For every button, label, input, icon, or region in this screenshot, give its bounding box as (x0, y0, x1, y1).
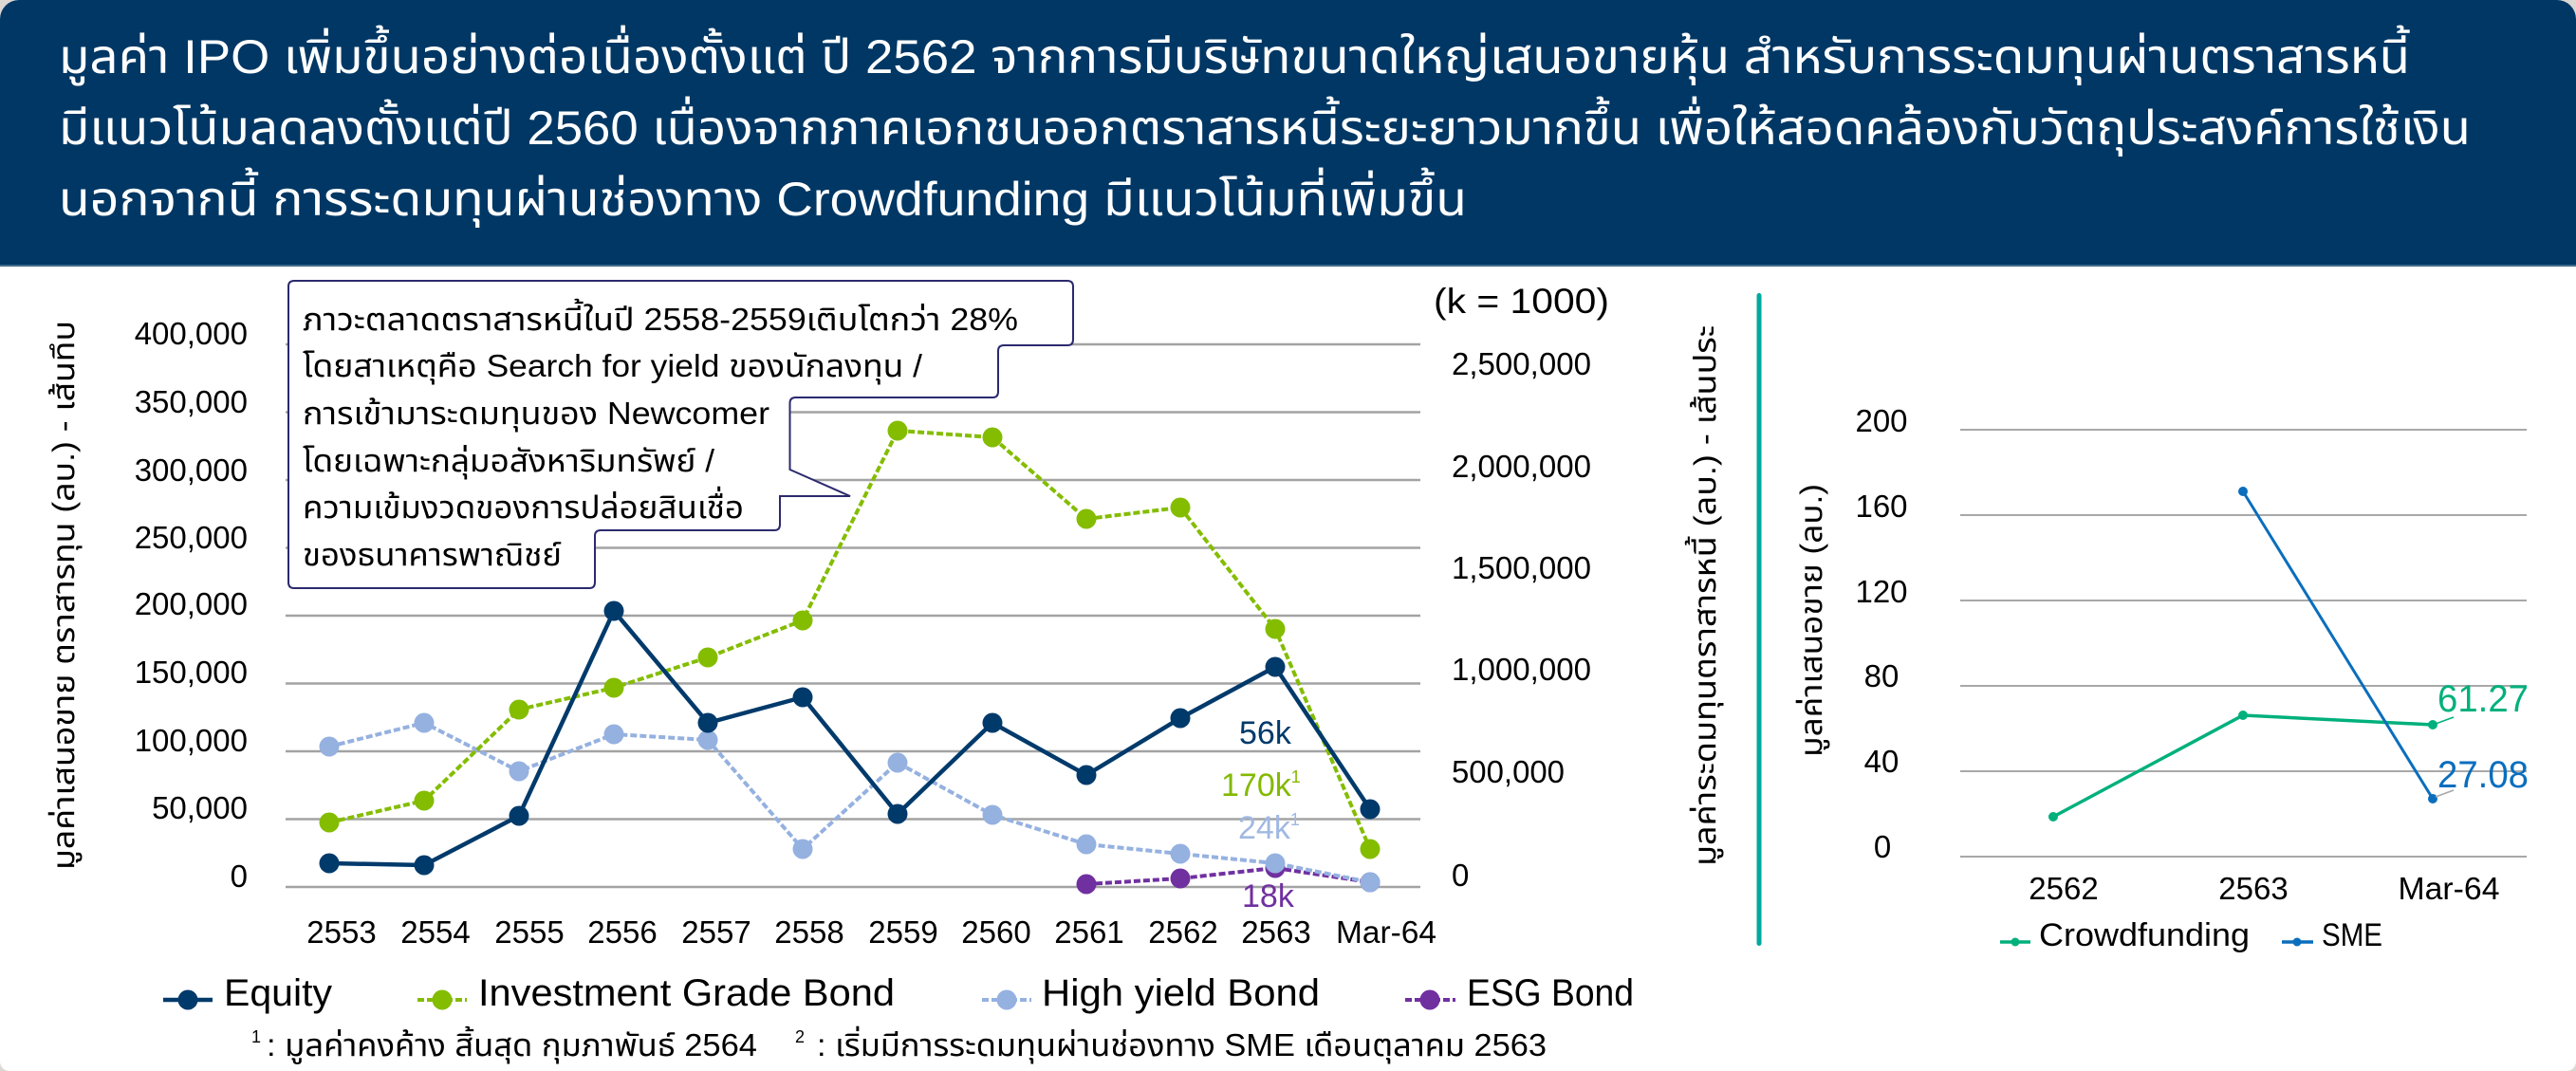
left axis labels: 400,000 (135, 316, 248, 351)
right axis labels: 500,000 (1452, 754, 1565, 789)
legend: ESG Bond: ESG Bond (1467, 972, 1634, 1014)
left axis labels: 350,000 (135, 384, 248, 419)
legend: Crowdfunding: Crowdfunding (2039, 917, 2250, 953)
left axis labels: 250,000 (135, 520, 248, 555)
series: ESG Bond (1076, 858, 1380, 894)
series: High yield Bond (319, 713, 1380, 892)
y axis labels: 200 (1855, 403, 1908, 438)
x axis labels: 2562 (2029, 871, 2099, 906)
value label: Investment Grade: 170k (1221, 767, 1291, 803)
series: Crowdfunding (2048, 711, 2437, 822)
x axis labels: 2561 (1054, 914, 1124, 950)
x axis labels: 2560 (961, 914, 1031, 950)
left chart y-axis title: มูลค่าเสนอขาย ตราสารทุน (ลบ.) - เส้นทึบ (46, 321, 83, 870)
series: SME (2238, 487, 2437, 803)
title banner: มีแนวโน้มลดลงตั้งแต่ปี 2560 เนื่องจากภาคเอกชนออกตราสารหนี้ระยะยาวมากขึ้น เพื่อให้สอดคล้องกับวัตถุประสงค์การใช้เงิน (59, 96, 2471, 157)
value label: SME: 27.08 (2437, 754, 2529, 796)
x axis labels: 2558 (774, 914, 844, 950)
y axis labels: 0 (1874, 829, 1891, 864)
value label: Investment Grade: 1 (1291, 767, 1301, 786)
right axis labels: 1,000,000 (1452, 652, 1591, 687)
y axis labels: 80 (1864, 658, 1899, 693)
title banner: มูลค่า IPO เพิ่มขึ้นอย่างต่อเนื่องตั้งแต่ ปี 2562 จากการมีบริษัทขนาดใหญ่เสนอขายหุ้น สำหรับการระดมทุนผ่านตราสารหนี้ (59, 25, 2410, 85)
legend: Equity: Equity (224, 972, 332, 1014)
title banner: นอกจากนี้ การระดมทุนผ่านช่องทาง Crowdfunding มีแนวโน้มที่เพิ่มขึ้น (59, 167, 1467, 228)
small chart y-axis title: มูลค่าเสนอขาย (ลบ.) (1794, 484, 1830, 757)
callout: bond market growth note: ความเข้มงวดของการปล่อยสินเชื่อ (303, 486, 744, 525)
right chart: Crowdfunding and SME (1855, 403, 2529, 906)
callout: bond market growth note: การเข้ามาระดมทุนของ Newcomer (303, 396, 769, 433)
callout: bond market growth note: โดยสาเหตุคือ Search for yield ของนักลงทุน / (303, 348, 923, 385)
right chart legend (2000, 917, 2382, 953)
value label: High yield: 1 (1290, 810, 1300, 829)
right axis labels: 2,500,000 (1452, 346, 1591, 381)
x axis labels: 2563 (1241, 914, 1311, 950)
x axis labels (2029, 871, 2499, 906)
y axis labels: 160 (1855, 489, 1908, 524)
x axis labels: 2557 (681, 914, 751, 950)
left axis labels: 50,000 (152, 790, 248, 825)
x axis labels: 2562 (1148, 914, 1218, 950)
value label: ESG: 18k (1242, 878, 1295, 914)
legend: High yield Bond: High yield Bond (1042, 972, 1320, 1014)
right axis labels (1452, 346, 1591, 893)
footnotes: 2 (795, 1027, 805, 1046)
x axis labels: Mar-64 (2399, 871, 2499, 906)
x axis labels: Mar-64 (1336, 914, 1436, 950)
title banner (0, 0, 2576, 267)
value label: Equity: 56k (1239, 715, 1292, 751)
series: Investment Grade Bond (319, 421, 1380, 859)
left axis labels: 100,000 (135, 723, 248, 758)
callout: bond market growth note: โดยเฉพาะกลุ่มอสังหาริมทรัพย์ / (303, 443, 715, 480)
legend: Equity (163, 972, 332, 1014)
grid lines (1960, 430, 2527, 857)
x axis labels: 2563 (2218, 871, 2289, 906)
grid lines (286, 344, 1420, 887)
footnotes (251, 1025, 1547, 1064)
y axis labels: 40 (1864, 744, 1899, 779)
callout: bond market growth note: ของธนาคารพาณิชย์ (303, 537, 562, 572)
legend: ESG Bond (1405, 972, 1634, 1014)
left chart legend (163, 972, 1634, 1014)
right axis labels: 0 (1452, 858, 1469, 893)
legend: Investment Grade Bond: Investment Grade Bond (478, 972, 895, 1014)
callout: bond market growth note (288, 281, 1073, 588)
left axis labels (135, 316, 248, 894)
callout: bond market growth note: ภาวะตลาดตราสารหนี้ในปี 2558-2559เติบโตกว่า 28% (303, 298, 1018, 337)
legend: SME: SME (2322, 917, 2382, 953)
left chart: fundraising lines (135, 282, 1609, 950)
footnotes: : มูลค่าคงค้าง สิ้นสุด กุมภาพันธ์ 2564 (267, 1025, 757, 1064)
left axis labels: 0 (231, 859, 248, 894)
y axis labels (1855, 403, 1908, 864)
value label: Crowdfunding: 61.27 (2437, 678, 2529, 720)
x axis labels: 2553 (306, 914, 377, 950)
x axis labels: 2555 (494, 914, 565, 950)
left axis labels: 150,000 (135, 655, 248, 690)
unit note: (k = 1000) (1434, 282, 1609, 321)
x axis labels (306, 914, 1436, 950)
left axis labels: 300,000 (135, 452, 248, 488)
footnotes: : เริ่มมีการระดมทุนผ่านช่องทาง SME เดือนตุลาคม 2563 (817, 1025, 1547, 1064)
value label: High yield: 24k (1238, 810, 1290, 846)
footnotes: 1 (251, 1027, 261, 1046)
y axis labels: 120 (1855, 574, 1908, 609)
panel divider (1757, 293, 1761, 946)
legend: SME (2282, 917, 2382, 953)
x axis labels: 2556 (587, 914, 658, 950)
x axis labels: 2559 (868, 914, 938, 950)
left axis labels: 200,000 (135, 586, 248, 621)
bond axis title: มูลค่าระดมทุนตราสารหนี้ (ลบ.) - เส้นประ (1684, 325, 1724, 866)
right axis labels: 2,000,000 (1452, 449, 1591, 484)
right axis labels: 1,500,000 (1452, 550, 1591, 585)
x axis labels: 2554 (400, 914, 471, 950)
series: Equity (319, 601, 1380, 875)
